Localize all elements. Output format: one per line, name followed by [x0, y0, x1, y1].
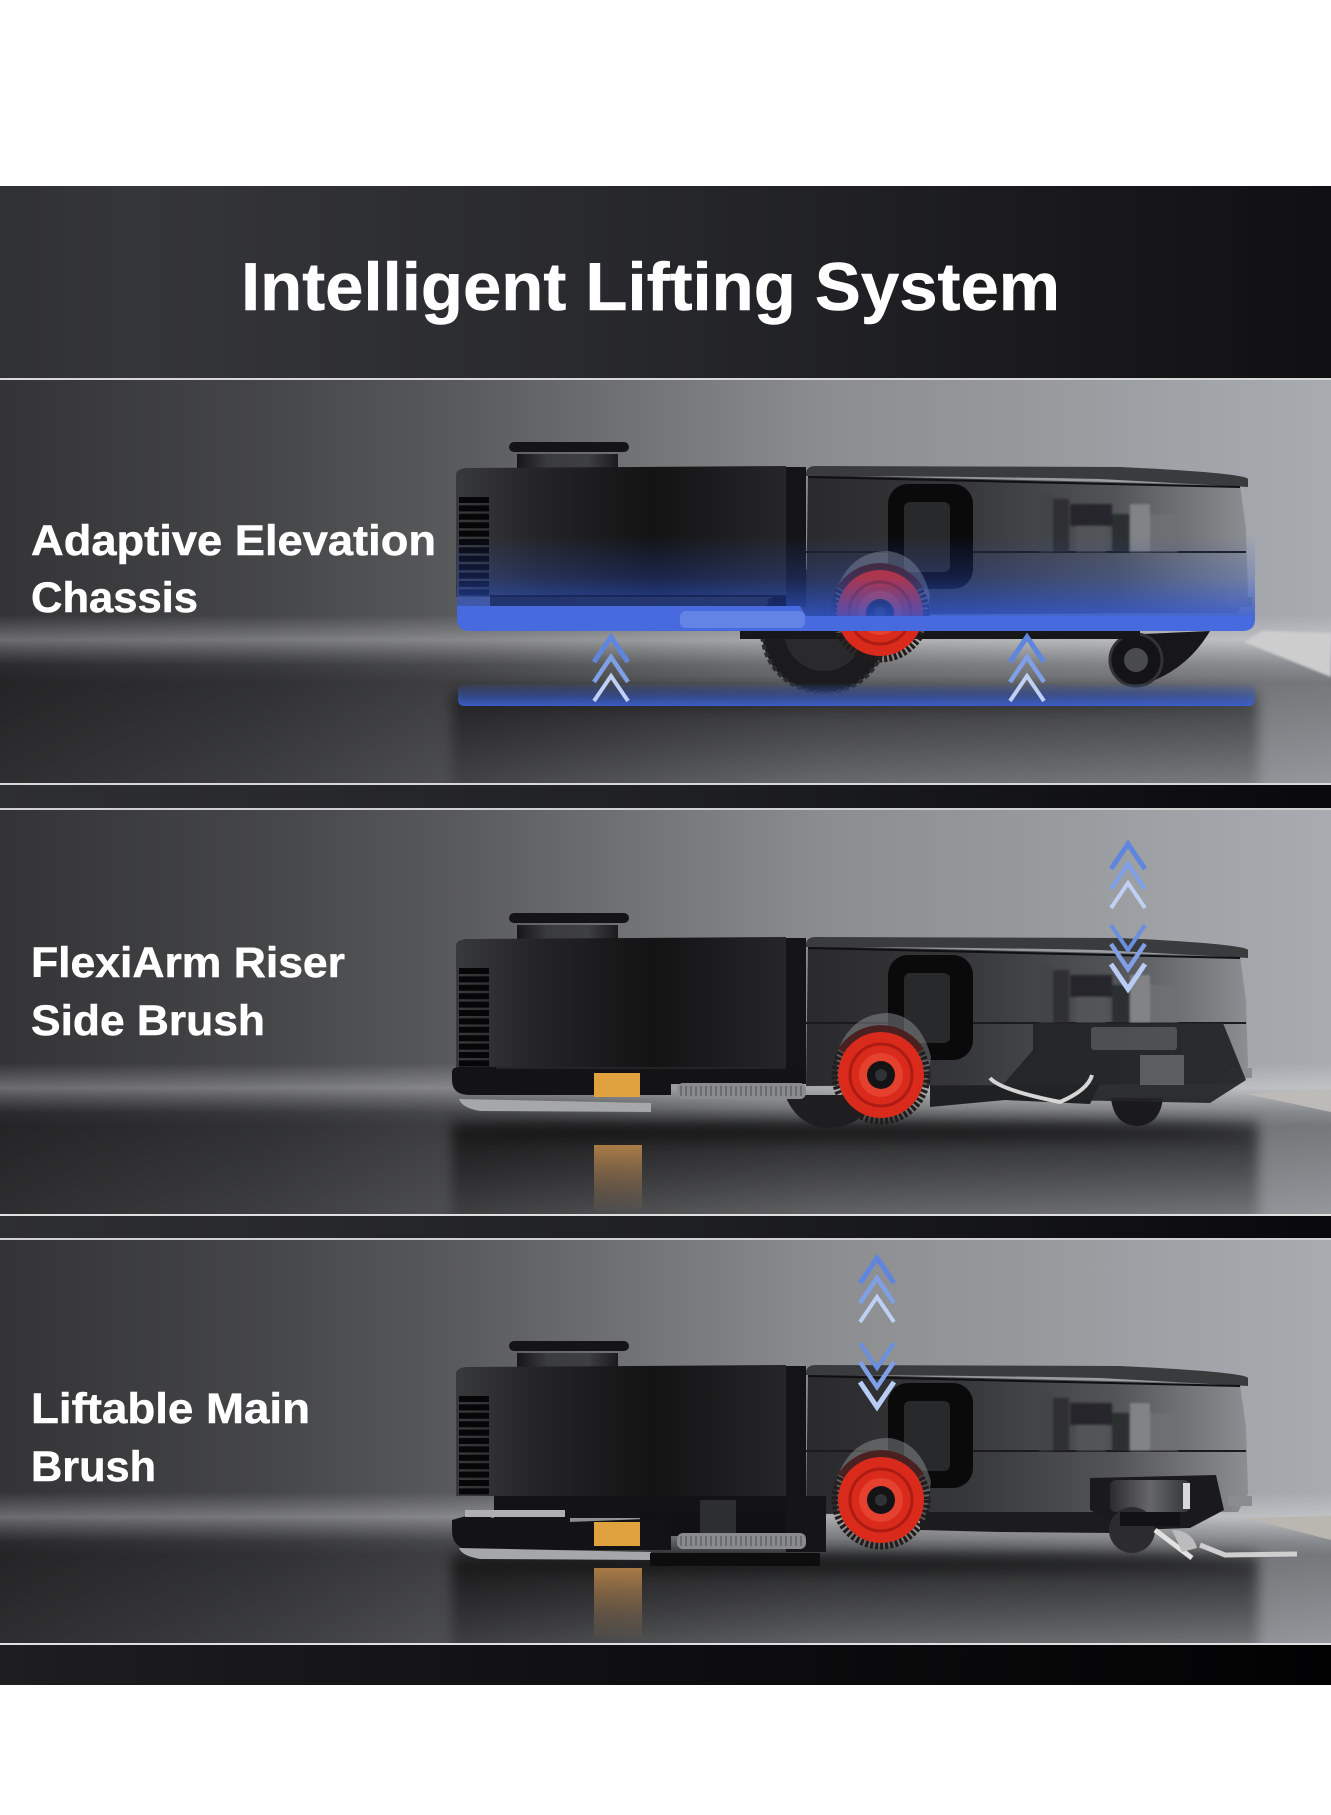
carpet: [1247, 1089, 1331, 1112]
label: [31, 517, 436, 622]
orange tab: [594, 1522, 640, 1546]
main brush: [835, 1013, 931, 1121]
label: FlexiArm Riser: [31, 939, 345, 987]
docking base: [452, 1510, 820, 1566]
main brush: [835, 1438, 931, 1546]
arrow: down: [860, 1343, 894, 1407]
mop pad: [459, 1099, 651, 1112]
lower chassis: [1000, 1023, 1246, 1103]
panel: adaptive elevation chassis: [0, 378, 1331, 803]
side brush unit: [1090, 1475, 1297, 1558]
arrow: up right: [1010, 637, 1044, 701]
chassis strip: [920, 1512, 1115, 1533]
chassis strip: [930, 1084, 1100, 1107]
mop pad: [459, 1548, 651, 1560]
robot upper body: [456, 913, 1252, 1086]
drive wheel: [785, 1095, 880, 1128]
arrow: up left: [594, 637, 628, 701]
robot upper body: [456, 442, 1252, 615]
divider band 1: [0, 785, 1331, 808]
title: Intelligent Lifting System: [241, 249, 1060, 325]
label: Side Brush: [31, 997, 265, 1045]
blue floor plate: [458, 684, 1255, 706]
label: [31, 1385, 310, 1491]
divider band 2: [0, 1216, 1331, 1238]
title band: [0, 186, 1331, 378]
drive wheel: [762, 569, 886, 693]
panel: liftable main brush: [0, 1238, 1331, 1664]
roller mop: [677, 1533, 806, 1549]
orange reflection: [594, 1145, 642, 1211]
roller mop: [677, 1083, 806, 1099]
caster wheel: [1111, 1098, 1163, 1126]
arrow: up: [1111, 844, 1145, 908]
label: Liftable Main: [31, 1385, 310, 1433]
label: Adaptive Elevation: [31, 517, 436, 565]
docking base: [452, 1067, 806, 1112]
orange tab: [594, 1073, 640, 1097]
caster wheel: [1110, 631, 1210, 686]
label: [31, 939, 345, 1045]
label: Chassis: [31, 574, 198, 622]
label: Brush: [31, 1443, 156, 1491]
orange reflection: [594, 1568, 642, 1638]
panel: flexiarm riser side brush: [0, 808, 1331, 1234]
carpet: [1244, 631, 1331, 677]
main brush: [834, 551, 930, 659]
blue chassis glow: [457, 535, 1255, 631]
arrow: down: [1111, 925, 1145, 989]
carpet: [1246, 1516, 1331, 1540]
arrow: up: [860, 1258, 894, 1322]
robot upper body: [456, 1341, 1252, 1514]
lift mechanism: [494, 1496, 826, 1552]
bottom band: [0, 1645, 1331, 1685]
side brush: [990, 1075, 1092, 1102]
undercarriage strip: [740, 628, 1140, 639]
